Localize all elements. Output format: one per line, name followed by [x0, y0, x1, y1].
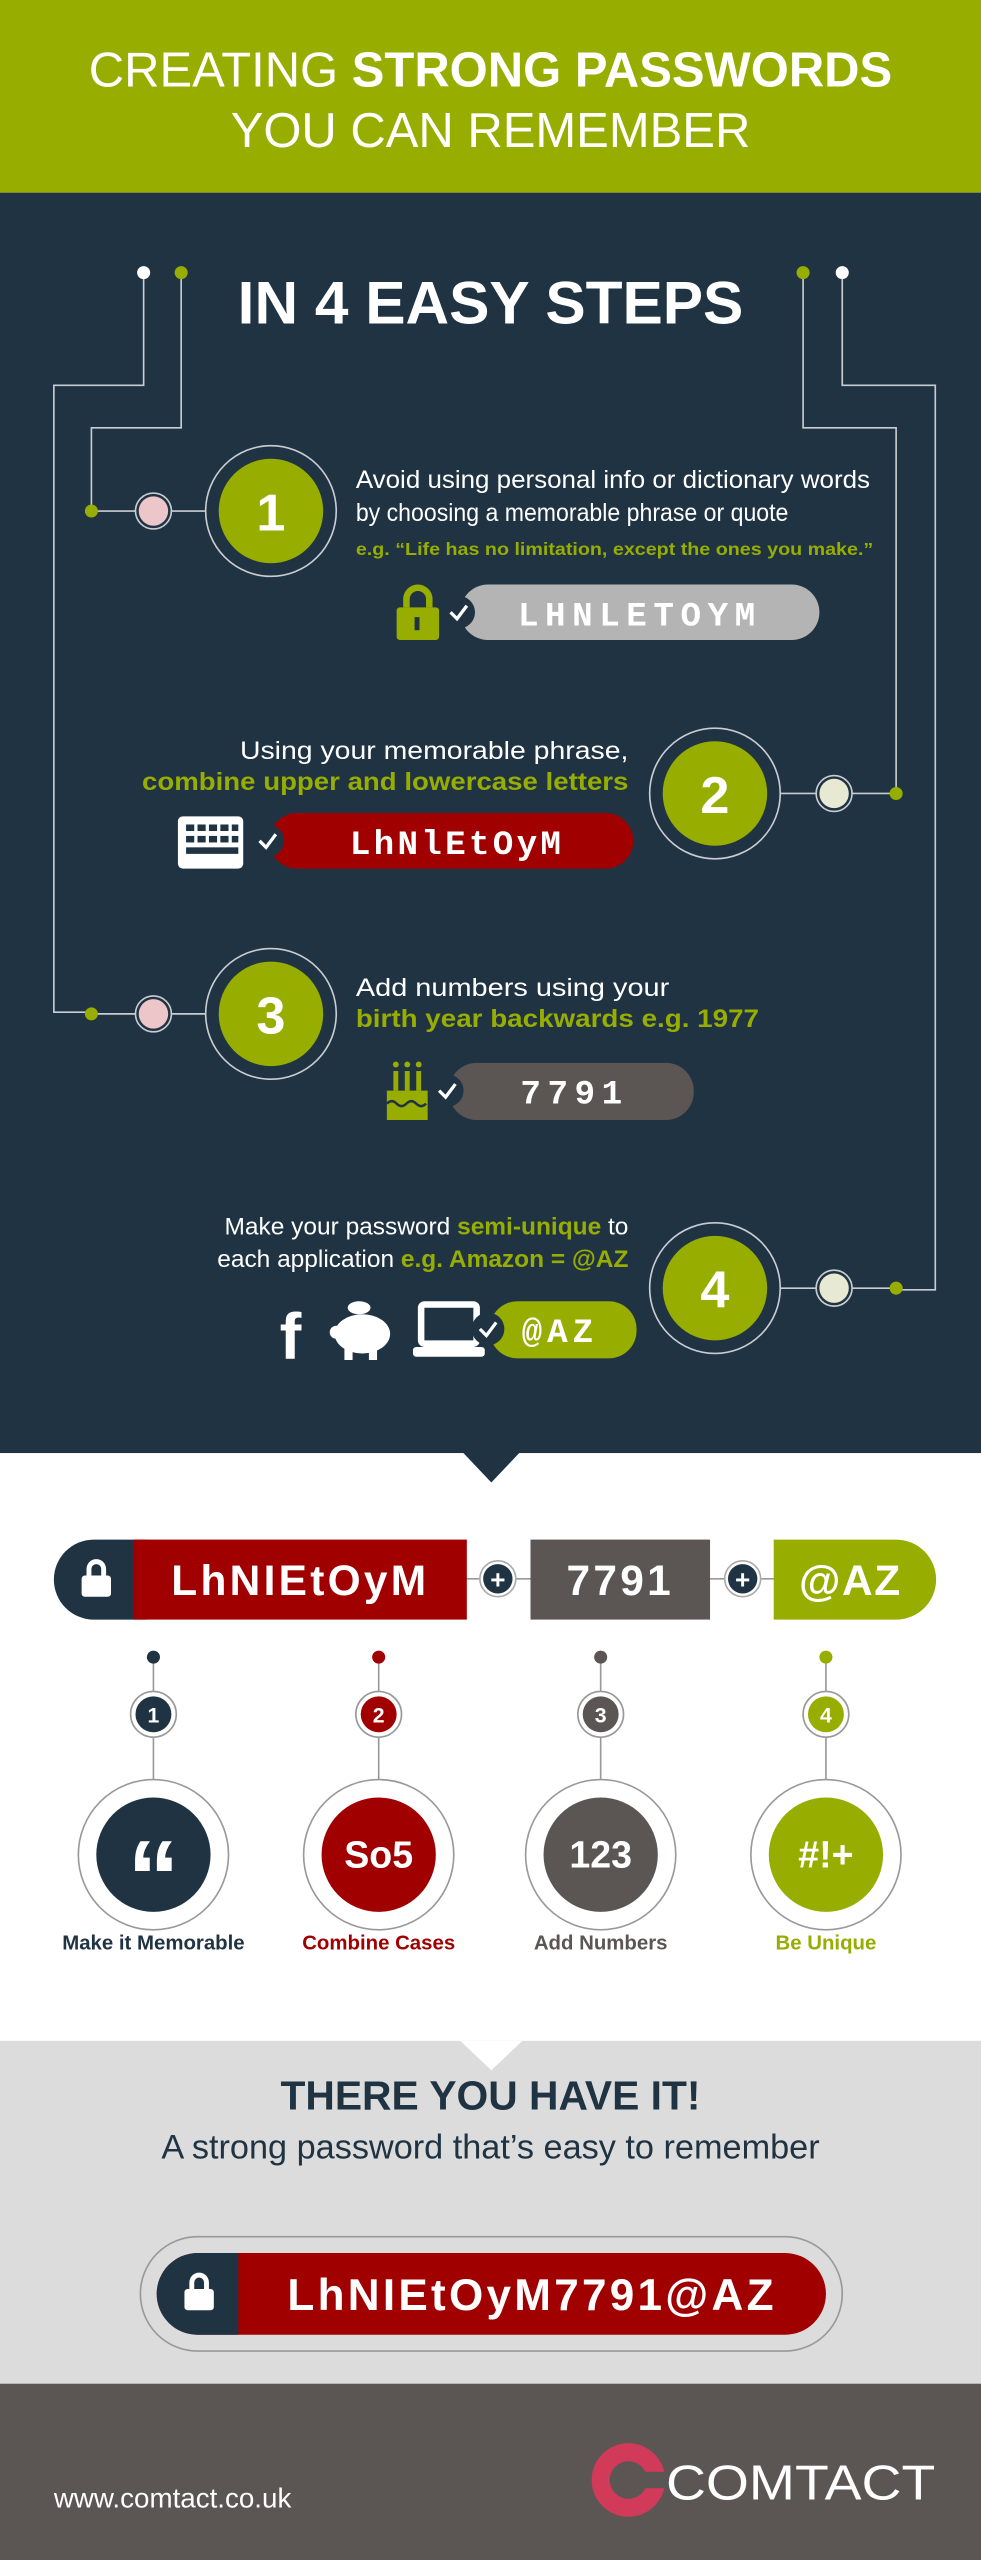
step 3: 7791: [520, 1076, 629, 1115]
icon: lock: [397, 584, 439, 640]
summary item 3: 123: [569, 1834, 632, 1876]
step 1: [135, 446, 873, 640]
summary item 2: [302, 1651, 455, 1954]
title: YOU CAN REMEMBER: [231, 104, 750, 158]
password bar: +: [490, 1565, 505, 1595]
icon: facebook: f: [280, 1299, 302, 1372]
header band: [0, 0, 981, 193]
summary item 2: Combine Cases: [302, 1932, 455, 1954]
summary item 4: 4: [820, 1704, 832, 1727]
step 4: each application e.g. Amazon = @AZ: [217, 1246, 628, 1273]
final password pill: [140, 2237, 842, 2351]
summary item 3: [526, 1651, 676, 1954]
step 2: combine upper and lowercase letters: [142, 768, 628, 796]
step 1: e.g. “Life has no limitation, except the ones you make.”: [356, 539, 873, 559]
step 1: LHNLETOYM: [518, 597, 762, 636]
summary item 2: 2: [373, 1704, 385, 1727]
step 2: 2: [700, 767, 729, 825]
step 2: Using your memorable phrase,: [240, 737, 628, 765]
panel: steps: [0, 193, 981, 1482]
summary item 1: “: [127, 1819, 180, 1936]
summary item 4: [751, 1651, 901, 1954]
logo: COMTACT: [666, 2457, 935, 2511]
summary item 1: 1: [148, 1704, 160, 1727]
password bar: @AZ: [799, 1557, 902, 1604]
summary item 4: #!+: [798, 1834, 854, 1876]
heading: THERE YOU HAVE IT!: [280, 2072, 701, 2118]
final password pill: LhNIEtOyM7791@AZ: [287, 2271, 777, 2320]
password bar: 7791: [567, 1557, 674, 1604]
footer: [0, 2384, 981, 2560]
step 4: Make your password semi-unique to: [225, 1213, 628, 1240]
circuit lines: [54, 273, 935, 1290]
summary item 3: 3: [595, 1704, 607, 1727]
heading: in 4 easy steps: IN 4 EASY STEPS: [238, 268, 743, 336]
step 3: Add numbers using your: [356, 974, 669, 1002]
panel: combined password: [54, 1540, 936, 1954]
icon: cake: [387, 1062, 428, 1120]
summary item 1: [62, 1651, 245, 1954]
password bar: +: [735, 1565, 750, 1595]
title: CREATING STRONG PASSWORDS: [89, 44, 892, 98]
summary item 4: Be Unique: [776, 1932, 876, 1954]
summary item 1: Make it Memorable: [62, 1932, 245, 1954]
step 4: @AZ: [522, 1314, 598, 1353]
title: [89, 44, 892, 158]
panel: there you have it: [0, 2041, 981, 2384]
logo: [601, 2452, 935, 2511]
icon: keyboard: [178, 816, 243, 869]
step 2: LhNlEtOyM: [350, 826, 564, 865]
step 1: by choosing a memorable phrase or quote: [356, 499, 788, 527]
step 1: Avoid using personal info or dictionary words: [356, 466, 870, 494]
icon: piggy bank: [330, 1301, 390, 1360]
step 3: [135, 949, 759, 1120]
step 3: birth year backwards e.g. 1977: [356, 1005, 759, 1033]
step 3: 3: [256, 987, 285, 1045]
url: www.comtact.co.uk: [53, 2483, 291, 2514]
password bar: LhNIEtOyM: [171, 1557, 429, 1604]
step 1: 1: [256, 485, 285, 543]
step 2: [142, 728, 852, 869]
summary item 3: Add Numbers: [534, 1932, 668, 1954]
subheading: A strong password that’s easy to remember: [161, 2128, 820, 2166]
step 4: 4: [700, 1262, 729, 1320]
summary item 2: So5: [344, 1834, 413, 1876]
icon: laptop: [413, 1304, 485, 1357]
password bar: [54, 1540, 936, 1620]
step 4: [217, 1213, 852, 1372]
